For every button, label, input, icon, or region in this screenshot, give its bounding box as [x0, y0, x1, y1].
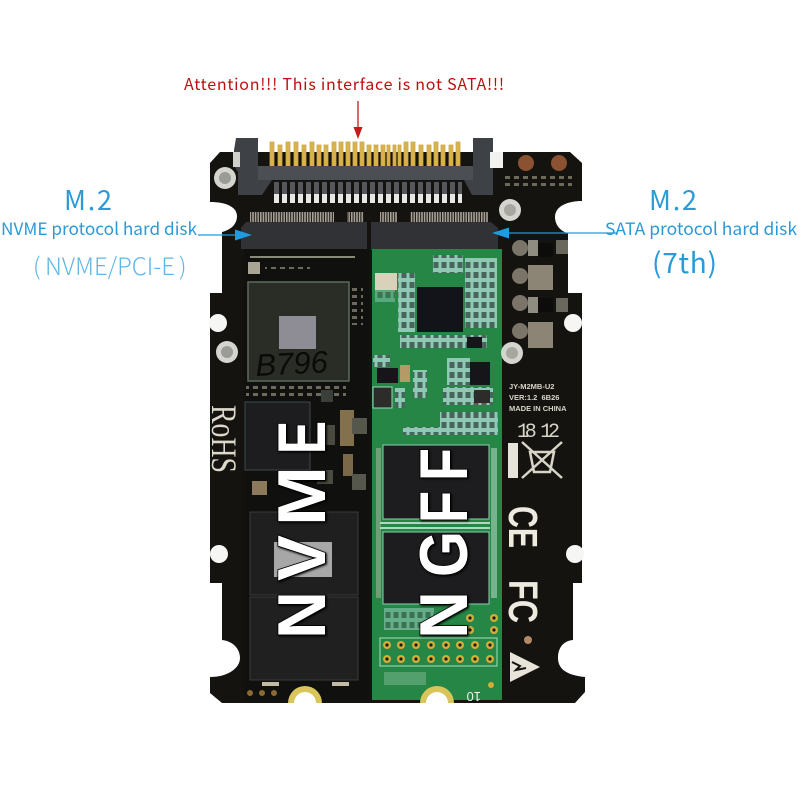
pcb outline — [210, 152, 585, 703]
status hole — [524, 636, 532, 644]
flash chip middle — [250, 512, 358, 595]
voltage regulators — [512, 240, 568, 348]
handwritten mark: B796 — [255, 344, 329, 383]
flash chip lower — [250, 597, 358, 680]
silkscreen: model info: MADE IN CHINA — [509, 404, 567, 413]
right model name: M.2 — [649, 179, 697, 218]
pad and ics — [375, 273, 397, 290]
right label: SATA drive: (7th) — [652, 242, 717, 282]
controller chip — [417, 287, 463, 332]
small components — [352, 285, 363, 325]
flash chip upper — [383, 445, 489, 519]
silkscreen: fc mark: FC — [500, 580, 546, 623]
M.2 socket right — [371, 212, 498, 250]
attention notice: Attention!!! This interface is not SATA!!! — [184, 71, 504, 95]
right label: SATA drive — [605, 179, 798, 282]
arrow: to right socket — [492, 228, 617, 238]
NVME overlay label: M — [264, 466, 340, 526]
NGFF overlay label: F — [406, 448, 482, 481]
NVME overlay label: V — [264, 535, 340, 581]
silkscreen: model info: JY-M2MB-U2 — [509, 382, 554, 391]
NGFF drive pcb — [372, 249, 502, 704]
left label: NVME drive: ( — [33, 247, 41, 282]
NGFF overlay label — [406, 448, 482, 639]
adapter board photo — [204, 138, 585, 704]
NGFF overlay label: N — [406, 591, 482, 639]
flash chip upper — [245, 402, 310, 470]
left label: NVME drive: NVME protocol hard disk — [1, 215, 198, 240]
NVME overlay label — [264, 421, 340, 639]
NVME drive pcb — [244, 249, 369, 700]
right label: SATA drive: SATA protocol hard disk — [605, 215, 798, 240]
silkscreen: recycling mark — [508, 442, 562, 478]
bottom half holes — [288, 686, 454, 703]
NGFF drive pcb: 10 — [467, 689, 481, 704]
SATA gold fingers — [270, 142, 460, 167]
silkscreen: model info: VER:1.2 6B26 — [509, 393, 559, 402]
pad header — [380, 638, 497, 666]
controller chip — [248, 282, 349, 381]
edge half holes — [209, 314, 584, 563]
white clips — [233, 152, 503, 168]
M.2 socket left — [241, 212, 367, 249]
arrow: to left socket — [198, 230, 252, 240]
arrow: to SATA interface — [354, 101, 362, 139]
power LEDs — [505, 155, 572, 190]
silkscreen: rohs: RoHS — [204, 405, 244, 473]
bottom pads — [247, 690, 253, 696]
connector pins — [273, 182, 462, 203]
NGFF overlay label: G — [406, 531, 482, 577]
NVME overlay label: E — [264, 421, 340, 454]
left label: NVME drive: ) — [179, 247, 187, 282]
NVME overlay label: N — [264, 591, 340, 639]
flash chip lower — [383, 532, 489, 604]
left label: NVME drive: NVME/PCI-E — [45, 247, 175, 282]
left model name: M.2 — [64, 179, 112, 218]
SATA connector body — [234, 138, 493, 195]
left screw holes — [214, 167, 238, 363]
silkscreen: model info — [509, 382, 567, 413]
silkscreen: date code: 18 12 — [517, 421, 560, 444]
right screw holes — [499, 199, 523, 364]
board component clusters — [373, 255, 498, 435]
left label: NVME drive — [1, 179, 198, 282]
silkscreen: esd triangle — [510, 652, 540, 682]
label reflection — [274, 542, 332, 577]
silkscreen: ce mark: CE — [500, 506, 546, 548]
NGFF overlay label: F — [406, 491, 482, 523]
